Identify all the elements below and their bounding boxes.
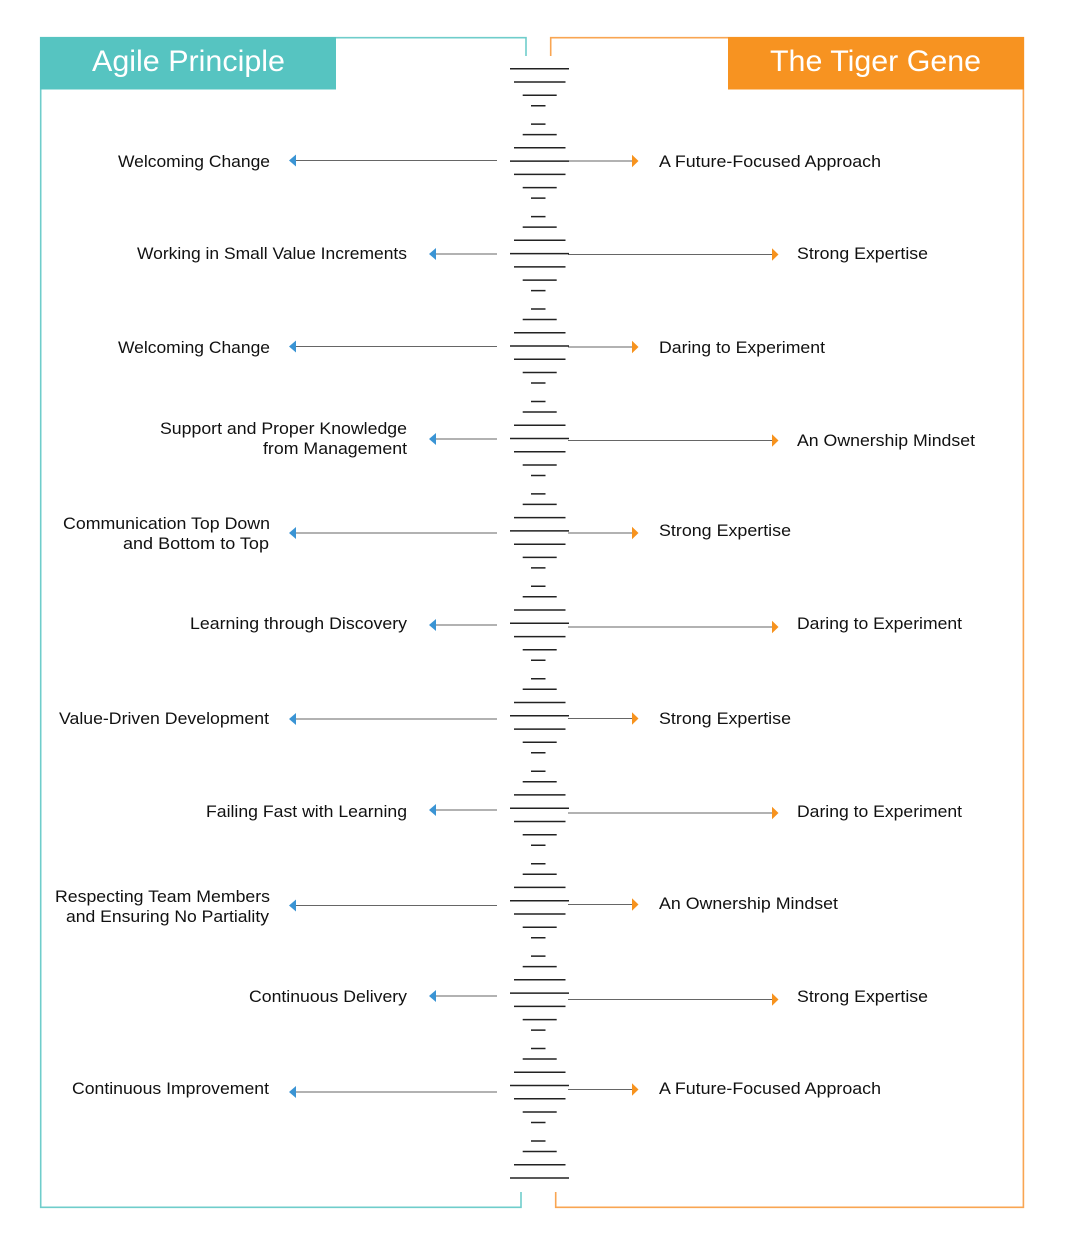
- arrow: Continuous Delivery: [429, 990, 497, 1002]
- heading: The Tiger Gene: The Tiger Gene: [770, 45, 981, 78]
- label: Welcoming Change: Welcoming Change: [118, 152, 270, 171]
- label: Respecting Team Members and Ensuring No Partiality: [55, 887, 270, 926]
- arrow: Daring to Experiment: [568, 807, 778, 819]
- arrow: Failing Fast with Learning: [429, 804, 497, 816]
- label: An Ownership Mindset: An Ownership Mindset: [797, 431, 975, 450]
- label: Communication Top Down and Bottom to Top: and Bottom to Top: [123, 534, 269, 553]
- arrow: Respecting Team Members: [289, 900, 497, 912]
- label: Strong Expertise: Strong Expertise: [797, 987, 928, 1006]
- arrow: An Ownership Mindset: [568, 434, 778, 447]
- label: Strong Expertise: Strong Expertise: [659, 709, 791, 728]
- label: Respecting Team Members and Ensuring No Partiality: and Ensuring No Partiality: [66, 907, 270, 926]
- panel frame: teal: [41, 38, 526, 1207]
- label: Learning through Discovery: Learning through Discovery: [190, 614, 408, 633]
- arrow: Communication Top Down: [289, 527, 497, 539]
- label: Communication Top Down and Bottom to Top: Communication Top Down: [63, 514, 270, 533]
- arrow: Continuous Improvement: [289, 1086, 497, 1098]
- arrow: Working in Small Value Increments: [429, 248, 497, 260]
- heading: Agile Principle: Agile Principle: [92, 45, 285, 78]
- label: Support and Proper Knowledge from Management: from Management: [263, 439, 407, 458]
- label: Communication Top Down and Bottom to Top: [63, 514, 270, 553]
- label: Daring to Experiment: Daring to Experiment: [659, 338, 825, 357]
- arrow: Daring to Experiment: [568, 341, 638, 353]
- panel: Agile Principle: [40, 37, 526, 1207]
- arrow: Support and Proper Knowledge: [429, 433, 497, 445]
- arrow: Daring to Experiment: [568, 621, 778, 633]
- label: Support and Proper Knowledge from Management: [160, 419, 407, 458]
- arrow: Value-Driven Development: [289, 713, 497, 725]
- heading: The Tiger Gene: [728, 37, 1024, 90]
- label: Failing Fast with Learning: Failing Fast with Learning: [206, 802, 407, 821]
- central spine of stacked horizontal bars: [510, 69, 569, 1178]
- label: Strong Expertise: Strong Expertise: [797, 244, 928, 263]
- label: Daring to Experiment: Daring to Experiment: [797, 802, 962, 821]
- arrow: Strong Expertise: [568, 993, 778, 1006]
- arrow: Learning through Discovery: [429, 619, 497, 631]
- arrow: A Future-Focused Approach: [568, 155, 638, 167]
- label: Daring to Experiment: Daring to Experiment: [797, 614, 962, 633]
- arrow: A Future-Focused Approach: [568, 1083, 638, 1096]
- heading: Agile Principle: [40, 37, 336, 90]
- label: Value-Driven Development: Value-Driven Development: [59, 709, 269, 728]
- arrow: Strong Expertise: [568, 712, 638, 725]
- arrow: Strong Expertise: [568, 248, 778, 261]
- arrow: Welcoming Change: [289, 340, 497, 352]
- panel frame: orange: [551, 38, 1023, 1207]
- label: Welcoming Change: Welcoming Change: [118, 338, 270, 357]
- arrow: An Ownership Mindset: [568, 898, 638, 911]
- label: Strong Expertise: Strong Expertise: [659, 521, 791, 540]
- label: An Ownership Mindset: An Ownership Mindset: [659, 894, 838, 913]
- label: Continuous Delivery: Continuous Delivery: [249, 987, 408, 1006]
- panel: The Tiger Gene: [551, 37, 1024, 1207]
- label: A Future-Focused Approach: A Future-Focused Approach: [659, 1079, 881, 1098]
- arrow: Welcoming Change: [289, 154, 497, 166]
- label: A Future-Focused Approach: A Future-Focused Approach: [659, 152, 881, 171]
- label: Working in Small Value Increments: Working in Small Value Increments: [137, 244, 407, 263]
- label: Continuous Improvement: Continuous Improvement: [72, 1079, 269, 1098]
- label: Support and Proper Knowledge from Management: Support and Proper Knowledge: [160, 419, 407, 438]
- label: Respecting Team Members and Ensuring No Partiality: Respecting Team Members: [55, 887, 270, 906]
- arrow: Strong Expertise: [568, 527, 638, 539]
